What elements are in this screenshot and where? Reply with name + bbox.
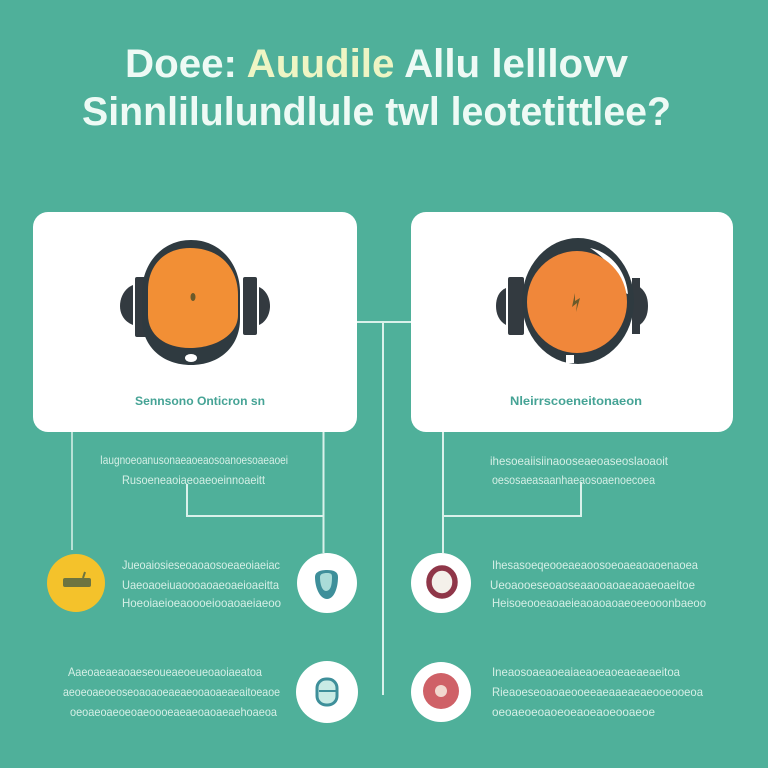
text block: row two left: oeoaeoaeoeoaeoooeaeaeoaoaeaehoaeoa xyxy=(70,705,277,719)
panel: right card xyxy=(411,212,733,432)
text block: row one right xyxy=(490,558,706,610)
text block: row one right: Heisoeooeaoaeieaoaoaoaeoeeooonbaeoo xyxy=(492,596,706,610)
title: Doee: Auudile Allu lelllovv xyxy=(125,42,629,86)
title xyxy=(82,42,671,134)
text block: row two left: aeoeoaeoeoseoaoaoeaeaeooaoaeaeaitoeaoe xyxy=(63,685,280,699)
text block: row two right: Ineaosoaeaoeaiaeaoeaoeaeaeaeitoa xyxy=(492,665,680,679)
text block: left intro: Rusoeneaoiaeoaeoeinnoaeitt xyxy=(122,473,266,487)
text block: left intro xyxy=(100,453,288,487)
icon: yellow circle xyxy=(47,554,105,612)
text block: row one right: Ueoaooeseoaoseaaooaoaeaoaeoaeitoe xyxy=(490,578,695,592)
text block: row two right: oeoaeoeoaoeoeaoeaoeooaeoe xyxy=(492,705,655,719)
text block: row one left: Uaeoaoeiuaoooaoaeoaeioaeitta xyxy=(122,578,279,592)
text block: row one left xyxy=(122,558,281,610)
text block: right intro xyxy=(490,454,669,487)
title: Sinnlilulundlule twl leotetittlee? xyxy=(82,90,671,134)
text block: left intro: Iaugnoeoanusonaeaoeaosoanoesoaeaoei xyxy=(100,453,288,467)
text block: row two right xyxy=(492,665,703,719)
panel: left card xyxy=(33,212,357,432)
icon: left headphones xyxy=(120,240,270,365)
right card caption: Nleirrscoeneitonaeon xyxy=(510,394,642,408)
icon: right headphones xyxy=(496,238,648,364)
icon: white circle teal cup xyxy=(297,553,357,613)
text block: row two right: Rieaoeseoaoaeooeeaeaaeaeaeooeooeoa xyxy=(492,685,703,699)
icon: white circle ring xyxy=(411,553,471,613)
text block: right intro: ihesoeaiisiinaooseaeoaseoslaoaoit xyxy=(490,454,669,468)
text block: row one left: Hoeoiaeioeaoooeiooaoaeiaeoo xyxy=(122,596,281,610)
text block: right intro: oesosaeasaanhaeaosoaenoecoea xyxy=(492,473,655,487)
left card caption: Sennsono Onticron sn xyxy=(135,394,265,408)
text block: row one left: Jueoaiosieseoaoaosoeaeoiaeiac xyxy=(122,558,280,572)
icon: white circle teal bottle xyxy=(296,661,358,723)
text block: row one right: Ihesasoeqeooeaeaoosoeoaeaoaoenaoea xyxy=(492,558,698,572)
text block: row two left xyxy=(63,665,280,719)
text block: row two left: Aaeoaeaeaoaeseoueaeoeueoaoiaeatoa xyxy=(68,665,262,679)
icon: white circle red badge xyxy=(411,662,471,722)
connector lines xyxy=(72,322,581,695)
